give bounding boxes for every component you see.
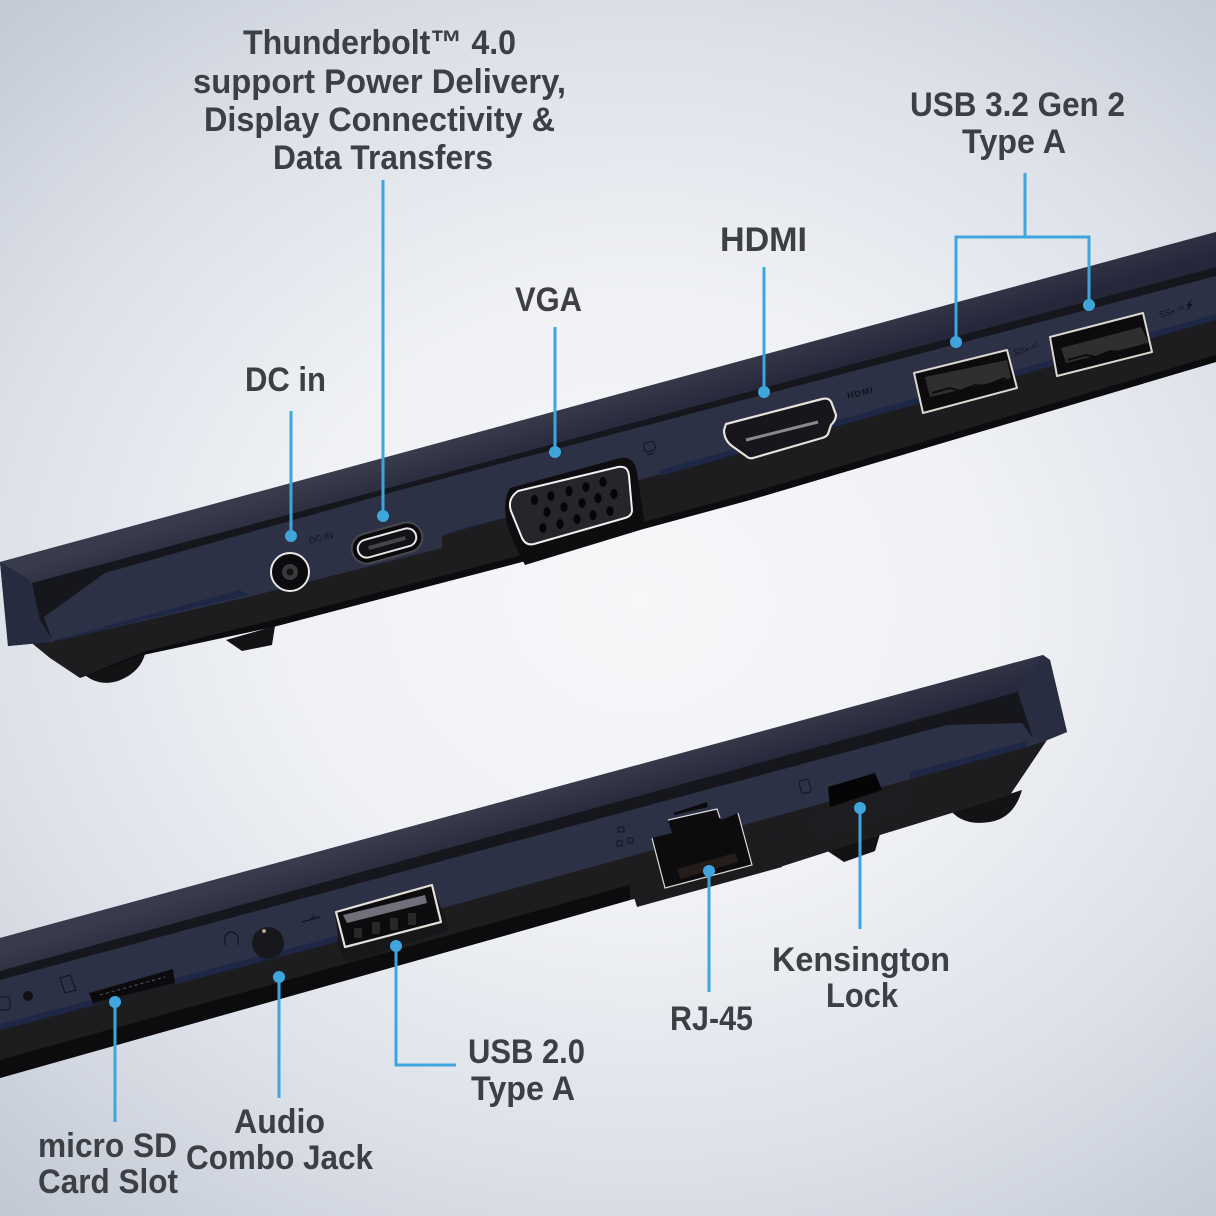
navy chassis [0, 232, 1216, 646]
heading: Audio [186, 1103, 373, 1177]
callout: VGA [549, 327, 561, 458]
heading: Kensington [772, 941, 950, 1015]
heading: USB 3.2 [910, 86, 1125, 161]
heading: Thunderbolt [193, 24, 566, 177]
navy stripe [52, 314, 1216, 642]
rubber foot small [826, 834, 880, 862]
label: SS 10 right: SS⇠¹⁰ [1158, 303, 1186, 320]
navy stripe [0, 741, 1027, 1030]
port: HDMI [724, 399, 836, 458]
heading: USB 2.0: Type A [471, 1070, 575, 1108]
port: DC in [271, 553, 309, 591]
black base band [0, 740, 1047, 1078]
port: audio jack [252, 927, 284, 959]
port: micro SD slot [89, 969, 175, 1003]
heading: Audio: Combo Jack [186, 1139, 373, 1177]
icon: monitor [643, 441, 656, 455]
label: SS 10 left: SS⇠¹⁰ [1012, 341, 1040, 358]
heading: micro SD: Card Slot [38, 1163, 178, 1201]
callout: USB 3.2 bracket [950, 173, 1095, 348]
heading: Thunderbolt: Data Transfers [273, 139, 493, 177]
heading: DC in: DC in [245, 361, 326, 399]
port: USB-C Thunderbolt [348, 519, 426, 567]
navy chassis [0, 655, 1067, 1030]
heading: Kensington: Kensington [772, 941, 950, 979]
callout: DC in [285, 411, 297, 542]
hinge groove [0, 692, 1033, 980]
rubber foot small [226, 626, 275, 651]
heading: RJ-45: RJ-45 [670, 1000, 753, 1038]
callout: HDMI [758, 267, 770, 398]
laptop: top view showing left-side ports [0, 232, 1216, 683]
right lid end [1018, 655, 1067, 741]
left lid end [0, 562, 50, 646]
port: VGA [505, 458, 644, 565]
callout: audio [273, 971, 285, 1098]
label: DC IN: DC IN [308, 530, 334, 546]
icon: SD card [60, 975, 76, 993]
callout: USB 2.0 [390, 940, 456, 1065]
label: HDMI mark: HDMI [846, 385, 875, 401]
icon: network [617, 827, 633, 846]
lid band [0, 655, 1043, 971]
heading: Thunderbolt: Thunderbolt™ 4.0 [243, 24, 516, 62]
rubber foot large [78, 650, 146, 683]
lid band [0, 232, 1216, 582]
heading: Kensington: Lock [826, 977, 898, 1015]
port: USB 2.0 [335, 885, 450, 963]
callout: Kensington [854, 802, 866, 929]
black base band [28, 313, 1216, 678]
laptop: bottom view showing right-side ports [0, 655, 1067, 1078]
black trim below SD [93, 983, 175, 1005]
callout: micro SD [109, 996, 121, 1122]
heading: Thunderbolt: Display Connectivity & [204, 101, 555, 139]
port: USB 3.2 left [914, 350, 1017, 413]
heading: micro SD [38, 1127, 178, 1201]
heading: VGA: VGA [515, 281, 582, 319]
icon: lock [799, 779, 812, 794]
heading: micro SD: micro SD [38, 1127, 177, 1165]
rubber foot large [952, 790, 1022, 823]
icon: bolt [1185, 299, 1193, 313]
port: RJ-45 [625, 802, 782, 907]
hinge groove [32, 267, 1216, 640]
heading: Thunderbolt: support Power Delivery, [193, 63, 566, 101]
port: Kensington lock [810, 773, 910, 835]
icon: LED [23, 991, 33, 1001]
icon: USB mark [302, 915, 320, 922]
heading: HDMI: HDMI [720, 221, 807, 259]
heading: USB 2.0 [468, 1033, 585, 1108]
icon: headset [225, 932, 238, 945]
heading: USB 3.2: USB 3.2 Gen 2 [910, 86, 1125, 124]
heading: USB 3.2: Type A [962, 123, 1066, 161]
heading: USB 2.0: USB 2.0 [468, 1033, 585, 1071]
heading: Audio: Audio [234, 1103, 325, 1141]
callout: RJ-45 [703, 865, 715, 992]
callout: Thunderbolt [377, 180, 389, 522]
port: USB 3.2 right [1050, 313, 1152, 376]
icon: disk [0, 997, 10, 1010]
